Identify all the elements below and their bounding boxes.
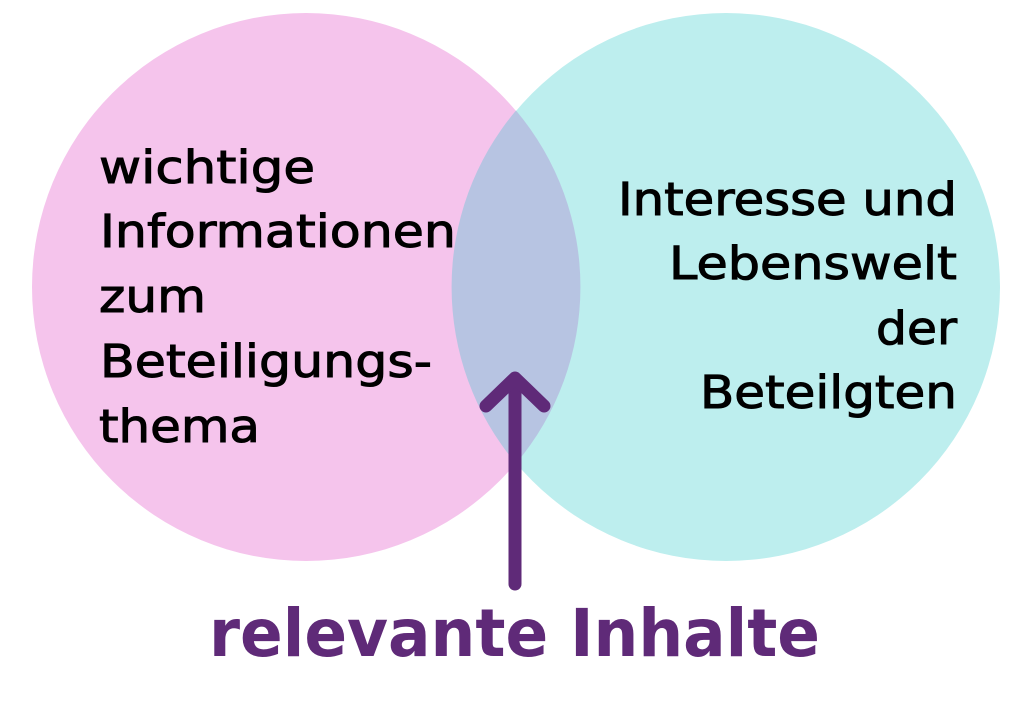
text block: right circle: Beteilgten	[700, 366, 957, 419]
text block: left circle: wichtige	[99, 141, 315, 194]
text block: left circle: thema	[99, 400, 260, 453]
text block: right circle: der	[876, 302, 957, 355]
text block: left circle: Beteiligungs-	[100, 335, 432, 388]
text block: left circle: Informationen	[100, 205, 456, 258]
text block: left circle: zum	[99, 270, 206, 323]
text block: right circle: Lebenswelt	[669, 237, 957, 290]
overlap: intersection of both circles	[452, 110, 580, 464]
label: relevant content: relevante Inhalte	[209, 595, 820, 672]
arrow: points up to the overlap	[486, 378, 544, 584]
circle: turquoise, interests and life world	[452, 13, 1000, 561]
text block: right circle	[618, 173, 957, 419]
text block: left circle	[99, 141, 456, 453]
text block: right circle: Interesse und	[618, 173, 957, 226]
circle: pink, important information	[32, 13, 580, 561]
